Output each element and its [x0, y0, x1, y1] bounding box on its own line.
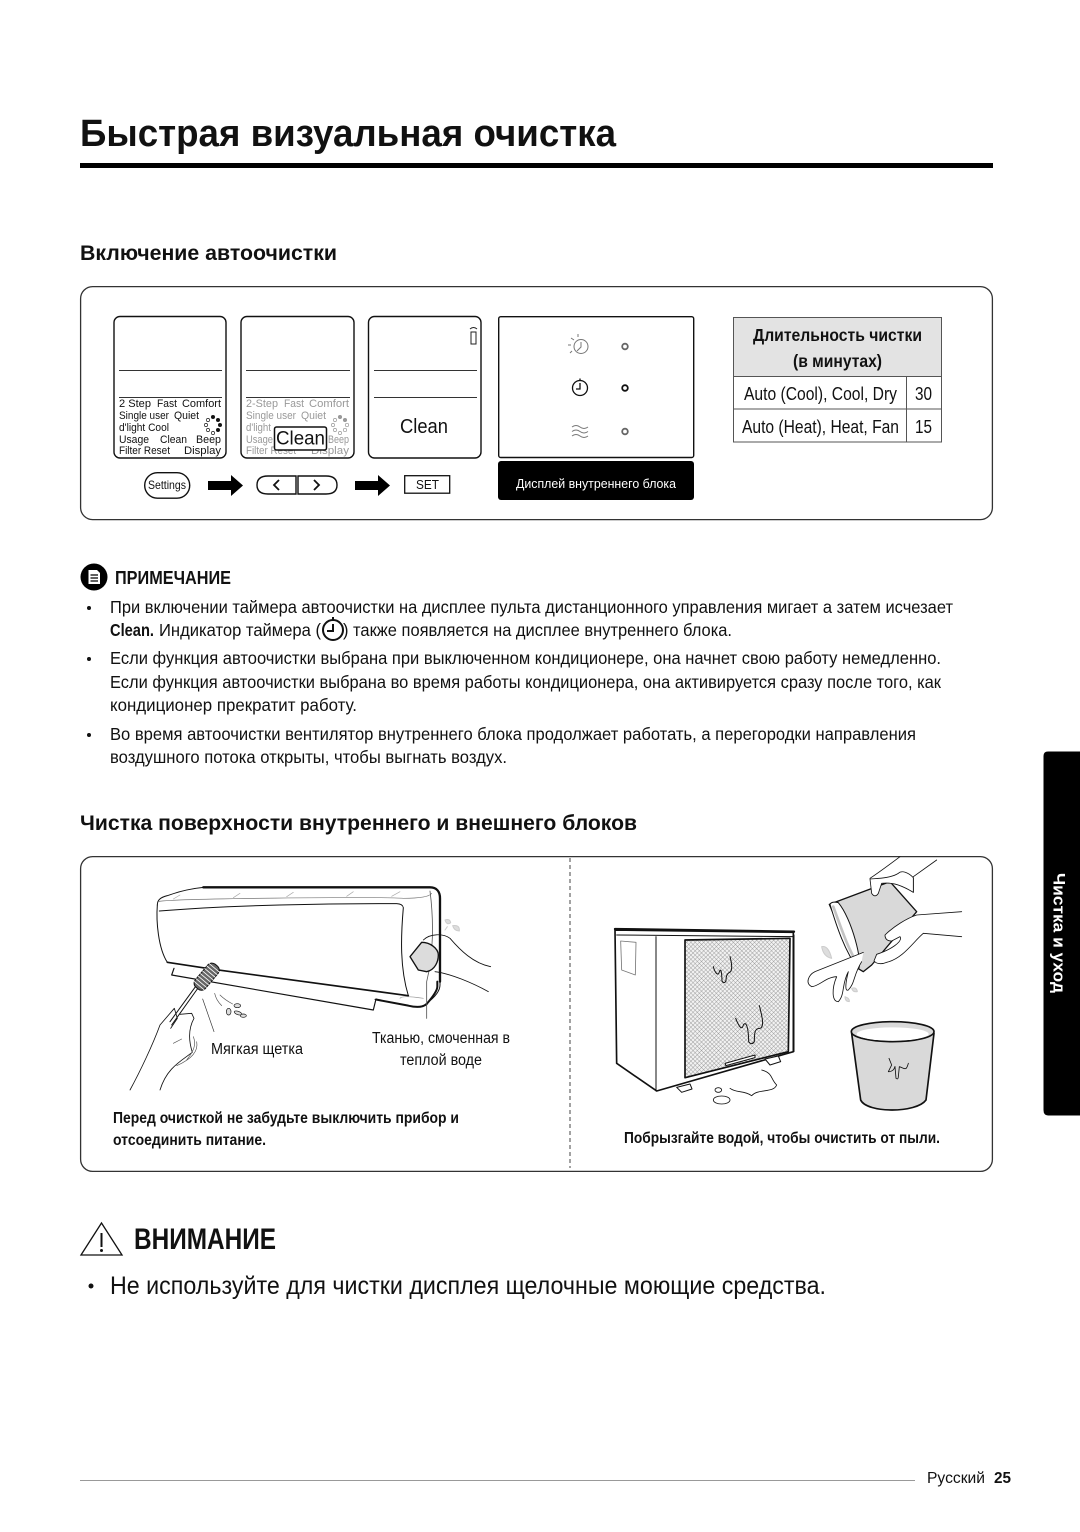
label: soft brush: Мягкая щетка	[211, 1041, 303, 1058]
remote screen 2: Usage	[246, 434, 273, 446]
panel: surface cleaning	[81, 857, 992, 1171]
remote screen 1	[114, 316, 226, 458]
title	[80, 113, 993, 168]
note text: Если функция автоочистки выбрана при выключенном кондиционере, она начнет свою работу немедленно.	[110, 648, 941, 668]
set button: SET	[416, 477, 439, 492]
duration table: Auto (Cool), Cool, Dry	[744, 384, 897, 404]
caution text: Не используйте для чистки дисплея щелочные моющие средства.	[110, 1272, 826, 1300]
remote screen 3	[368, 316, 481, 458]
set button	[405, 476, 450, 493]
remote screen 2	[241, 316, 354, 458]
splash	[808, 952, 863, 1002]
panel: auto clean	[81, 287, 992, 520]
arrow 2	[355, 475, 390, 496]
remote screen 1: Quiet	[174, 410, 199, 422]
remote screen 1: Clean	[160, 434, 187, 446]
remote screen 1: Single user	[119, 410, 169, 422]
remote screen 2: Quiet	[301, 410, 326, 422]
full bucket	[852, 1033, 934, 1110]
note text: воздушного потока открыты, чтобы выгнать воздух.	[110, 747, 507, 767]
remote screen 2: Filter Reset	[246, 445, 296, 457]
remote screen 1: Fast	[157, 398, 177, 410]
display caption	[498, 461, 694, 500]
remote screen 2: Single user	[246, 410, 296, 422]
note text: Во время автоочистки вентилятор внутреннего блока продолжает работать, а перегородки направления	[110, 724, 916, 744]
caption: left	[113, 1110, 459, 1149]
caution heading	[81, 1223, 276, 1256]
caption: left: Перед очисткой не забудьте выключить прибор и	[113, 1110, 459, 1127]
note text: Если функция автоочистки выбрана во время работы кондиционера, она активируется сразу после того, как	[110, 672, 941, 692]
duration table: 15	[915, 417, 932, 437]
remote screen 2: 2-Step	[246, 398, 278, 410]
note text: ) также появляется на дисплее внутреннего блока.	[343, 620, 732, 640]
caption: left: отсоединить питание.	[113, 1132, 266, 1149]
remote screen 1: Display	[184, 445, 222, 457]
duration table: Auto (Heat), Heat, Fan	[742, 417, 899, 437]
remote screen 2: d'light	[246, 422, 271, 434]
note heading: ПРИМЕЧАНИЕ	[115, 568, 231, 588]
footer: 25	[994, 1470, 1011, 1487]
remote screen 1: 2 Step	[119, 398, 151, 410]
label: wet cloth: теплой воде	[400, 1052, 482, 1069]
remote screen 1: d'light Cool	[119, 422, 169, 434]
chapter side tab	[1044, 752, 1080, 1116]
icon: timer	[323, 617, 343, 640]
label: wet cloth	[372, 1030, 510, 1069]
caution heading: ВНИМАНИЕ	[134, 1223, 276, 1256]
heading: auto clean: Включение автоочистки	[80, 241, 337, 265]
settings button	[145, 473, 190, 498]
pouring bucket	[829, 882, 917, 972]
remote screen 2: Clean	[276, 428, 325, 450]
chapter side tab: Чистка и уход	[1050, 873, 1068, 994]
remote screen 2: Comfort	[309, 398, 349, 410]
remote screen 2: Fast	[284, 398, 304, 410]
title: Быстрая визуальная очистка	[80, 113, 617, 155]
remote screen 2: Beep	[328, 434, 349, 446]
remote screen 1: Usage	[119, 434, 149, 446]
remote screen 1: Beep	[196, 434, 221, 446]
duration table	[734, 318, 942, 442]
brush	[192, 961, 221, 992]
duration table: Длительность чистки	[753, 325, 922, 345]
icon: warning triangle	[81, 1223, 122, 1255]
hands	[870, 857, 937, 892]
footer: Русский	[927, 1470, 985, 1487]
remote screen 3: Clean	[400, 416, 448, 438]
illustration: indoor unit cleaning	[130, 887, 491, 1090]
note text: При включении таймера автоочистки на дисплее пульта дистанционного управления мигает а затем исчезает	[110, 597, 953, 617]
display caption: Дисплей внутреннего блока	[516, 476, 677, 491]
left right buttons	[257, 476, 337, 494]
settings button: Settings	[148, 478, 186, 492]
note text	[87, 597, 953, 767]
arrow 1	[208, 475, 243, 496]
caption: right: Побрызгайте водой, чтобы очистить от пыли.	[624, 1130, 940, 1147]
illustration: outdoor unit and buckets	[615, 857, 962, 1110]
remote screen 1: Comfort	[182, 398, 221, 410]
note text: Clean.	[110, 620, 154, 640]
left hand	[130, 1008, 194, 1090]
note text: Индикатор таймера (	[159, 620, 321, 640]
duration table: (в минутах)	[793, 351, 882, 371]
note text: кондиционер прекратит работу.	[110, 695, 357, 715]
remote screen 1: Filter Reset	[119, 445, 170, 457]
heading: surface cleaning: Чистка поверхности внутреннего и внешнего блоков	[80, 811, 637, 835]
note heading	[80, 564, 231, 590]
label: wet cloth: Тканью, смоченная в	[372, 1030, 510, 1047]
indoor unit display	[499, 317, 694, 458]
remote screen 2: Display	[311, 445, 350, 457]
duration table: 30	[915, 384, 932, 404]
right hand and cloth	[423, 935, 491, 992]
footer	[80, 1470, 1011, 1487]
